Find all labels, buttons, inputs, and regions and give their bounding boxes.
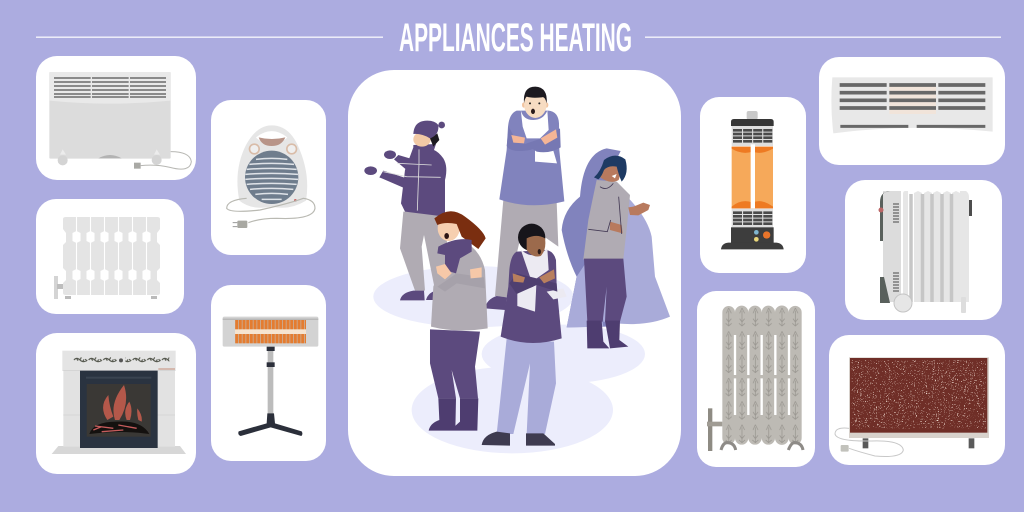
panel: wall convector heater: [36, 56, 196, 180]
person: woman with scarf: [426, 211, 488, 431]
icon: oil radiator: [878, 191, 972, 313]
person: boy in hat with mittens: [364, 121, 450, 300]
title rule: right: [645, 36, 1001, 38]
floor shadows: [373, 266, 645, 453]
icon: cast-iron radiator: [707, 305, 803, 451]
panel: fan heater: [211, 100, 326, 255]
icon: panel heater: [835, 357, 989, 457]
icon: convector heater: [49, 72, 191, 169]
panel: cast-iron radiator: [697, 291, 815, 467]
title: APPLIANCES HEATING: [399, 16, 632, 60]
panel: wall panel heater: [829, 335, 1005, 465]
icon: quartz stand heater: [223, 317, 318, 436]
icon: tower heater: [721, 111, 784, 249]
person: tall man with scarf: [485, 87, 564, 310]
title rule: left: [36, 36, 383, 38]
person: woman in blanket: [562, 148, 670, 348]
person: boy with scarf in front: [482, 224, 567, 446]
panel: electric fireplace: [36, 333, 196, 474]
panel: central illustration of cold people: [348, 70, 681, 476]
panel: oil-filled radiator: [845, 180, 1002, 320]
panel: quartz stand heater: [211, 285, 326, 461]
icon: air conditioner: [831, 77, 993, 133]
icon: electric fireplace: [52, 351, 186, 454]
panel: tower quartz heater: [700, 97, 806, 273]
icon: column radiator: [54, 217, 160, 299]
panel: column radiator: [36, 199, 184, 314]
panel: wall air conditioner: [819, 57, 1005, 165]
illustration: people shivering: [364, 87, 670, 453]
icon: fan heater: [227, 125, 315, 228]
